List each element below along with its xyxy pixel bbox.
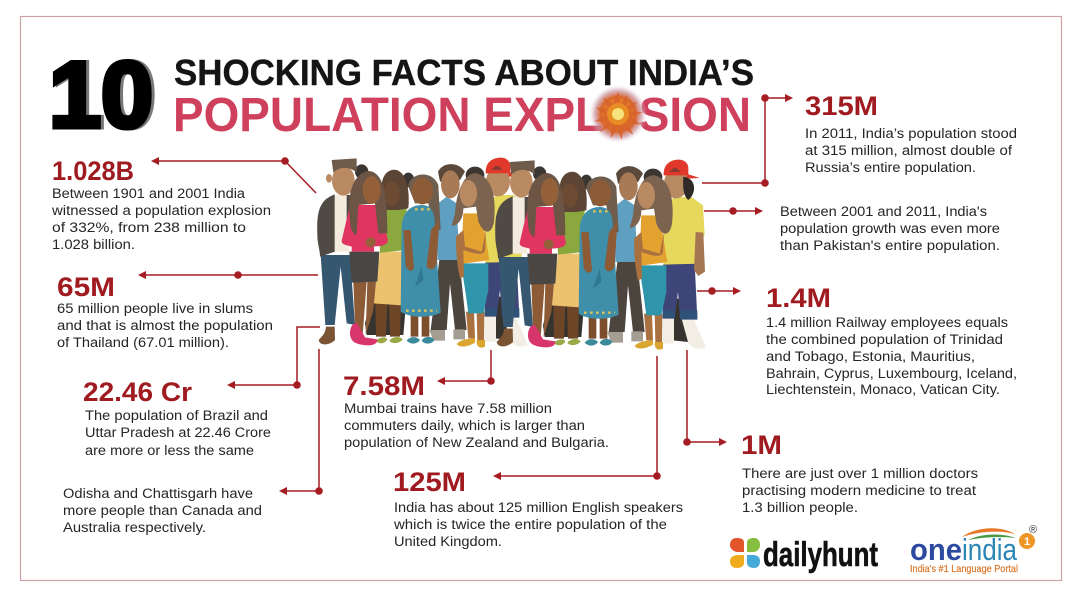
- fact: 125M: 125M: [393, 467, 466, 497]
- logo: dailyhunt: dailyhunt: [763, 536, 878, 574]
- fact: 1.028B: of 332%, from 238 million to: [52, 220, 246, 235]
- connector: Odisha: [286, 349, 323, 495]
- cap man: [485, 158, 528, 347]
- fact: 1.4M: 1.4M: [766, 283, 831, 313]
- fact: Odisha and Chattisgarh: [63, 486, 262, 535]
- fact: 1.028B: [51, 156, 271, 252]
- fact: 22.46 Cr: 22.46 Cr: [83, 377, 193, 407]
- woman in pink top: [342, 171, 388, 345]
- logo: dailyhunt: [730, 536, 878, 574]
- green top woman: [373, 170, 409, 343]
- fact: Pakistan comparison: Between 2001 and 2011, India's: [780, 204, 987, 219]
- fact: 7.58M: commuters daily, which is larger than: [344, 418, 585, 433]
- connector: 125M: [500, 356, 661, 480]
- connector: 1.4M: [697, 287, 734, 295]
- connector: 65M: [145, 271, 318, 279]
- blue shirt man: [429, 164, 467, 341]
- fact: 65M: and that is almost the population: [57, 318, 273, 333]
- woman in blue dress: [401, 174, 441, 344]
- fact: 125M: which is twice the entire population of the: [393, 517, 667, 532]
- fact: 315M: Russia’s entire population.: [805, 160, 976, 175]
- fact: 22.46 Cr: The population of Brazil and: [85, 408, 268, 423]
- fact: 1M: practising modern medicine to treat: [742, 483, 976, 498]
- woman in orange top: [452, 173, 495, 348]
- fact: Pakistan comparison: population growth was even more: [780, 221, 1000, 236]
- crowd group one: [317, 158, 528, 348]
- fact: 315M: In 2011, India’s population stood: [805, 126, 1017, 141]
- fact: 7.58M: Mumbai trains have 7.58 million: [344, 401, 552, 416]
- connector: Pakistan fact: [704, 207, 756, 215]
- fact: 125M: United Kingdom.: [394, 534, 502, 549]
- icon: explosion: [589, 85, 647, 143]
- fact: 1.4M: Liechtenstein, Monaco, Vatican City.: [766, 382, 1000, 397]
- back row shadows: [355, 164, 368, 179]
- connector: 315M: [702, 94, 786, 187]
- fact: 7.58M: population of New Zealand and Bulgaria.: [344, 435, 609, 450]
- title line 1: SHOCKING FACTS ABOUT INDIA’S: [174, 52, 754, 93]
- fact: 22.46 Cr: are more or less the same: [85, 443, 254, 458]
- arm and hair of last man: [683, 177, 705, 276]
- icon: dailyhunt petals: [730, 538, 760, 568]
- fact: 65M: 65 million people live in slums: [57, 301, 253, 316]
- fact: 125M: [393, 467, 683, 549]
- fact: 1M: 1.3 billion people.: [742, 500, 858, 515]
- fact: 7.58M: [343, 371, 609, 450]
- fact: 1.028B: 1.028B: [52, 156, 134, 186]
- title number 10: 10: [49, 42, 153, 147]
- connector: 22.46 Cr: [234, 327, 320, 389]
- fact: 315M: 315M: [805, 91, 878, 121]
- fact: 1.028B: 1.028 billion.: [52, 237, 135, 252]
- connector: 1.028B: [158, 157, 316, 193]
- title: [49, 42, 754, 147]
- fact: Pakistan comparison: than Pakistan's entire population.: [780, 238, 1000, 253]
- badge: number one: 1: [1024, 536, 1030, 548]
- logo: oneindia: india: [962, 532, 1018, 567]
- illustration: crowd of people: [317, 158, 706, 350]
- fact: 315M: [805, 91, 1017, 175]
- fact: 65M: [57, 272, 273, 350]
- fact: 1M: There are just over 1 million doctors: [742, 466, 978, 481]
- fact: 22.46 Cr: Uttar Pradesh at 22.46 Crore: [85, 425, 271, 440]
- logo: oneindia: one: [910, 532, 962, 567]
- crowd group two: [495, 160, 706, 350]
- fact: 1.4M: [766, 283, 1017, 397]
- fact: Pakistan comparison: [780, 204, 1000, 253]
- fact: 1.4M: Bahrain, Cyprus, Luxembourg, Iceland,: [766, 366, 1017, 381]
- fact: 1.4M: and Tobago, Estonia, Mauritius,: [766, 349, 975, 364]
- title number 10: 10: [52, 42, 156, 147]
- connector: 1M: [683, 350, 720, 446]
- title line 2: POPULATION EXPLOSION: [173, 89, 751, 142]
- logo: oneindia: ®: [1029, 524, 1037, 536]
- fact: 1M: 1M: [741, 430, 782, 460]
- fact: 1.4M: 1.4 million Railway employees equals: [766, 315, 1008, 330]
- fact: 1.028B: Between 1901 and 2001 India: [52, 186, 246, 201]
- fact: 22.46 Cr: [83, 377, 271, 458]
- fact: 65M: 65M: [57, 272, 115, 302]
- man in jacket: [317, 158, 357, 344]
- fact: 1.028B: witnessed a population explosion: [51, 203, 271, 218]
- fact: 125M: India has about 125 million English speakers: [394, 500, 683, 515]
- fact: 1M: [741, 430, 978, 515]
- fact: 315M: at 315 million, almost double of: [805, 143, 1012, 158]
- logo: oneindia: India's #1 Language Portal: [910, 563, 1018, 575]
- logo: oneindia: [910, 524, 1037, 575]
- connector: 7.58M: [444, 350, 495, 385]
- fact: 1.4M: the combined population of Trinidad: [766, 332, 1003, 347]
- fact: Odisha and Chattisgarh: Odisha and Chattisgarh have: [63, 486, 253, 501]
- fact: Odisha and Chattisgarh: more people than Canada and: [63, 503, 262, 518]
- fact: 65M: of Thailand (67.01 million).: [57, 335, 229, 350]
- fact: 7.58M: 7.58M: [343, 371, 425, 401]
- fact: Odisha and Chattisgarh: Australia respectively.: [63, 520, 206, 535]
